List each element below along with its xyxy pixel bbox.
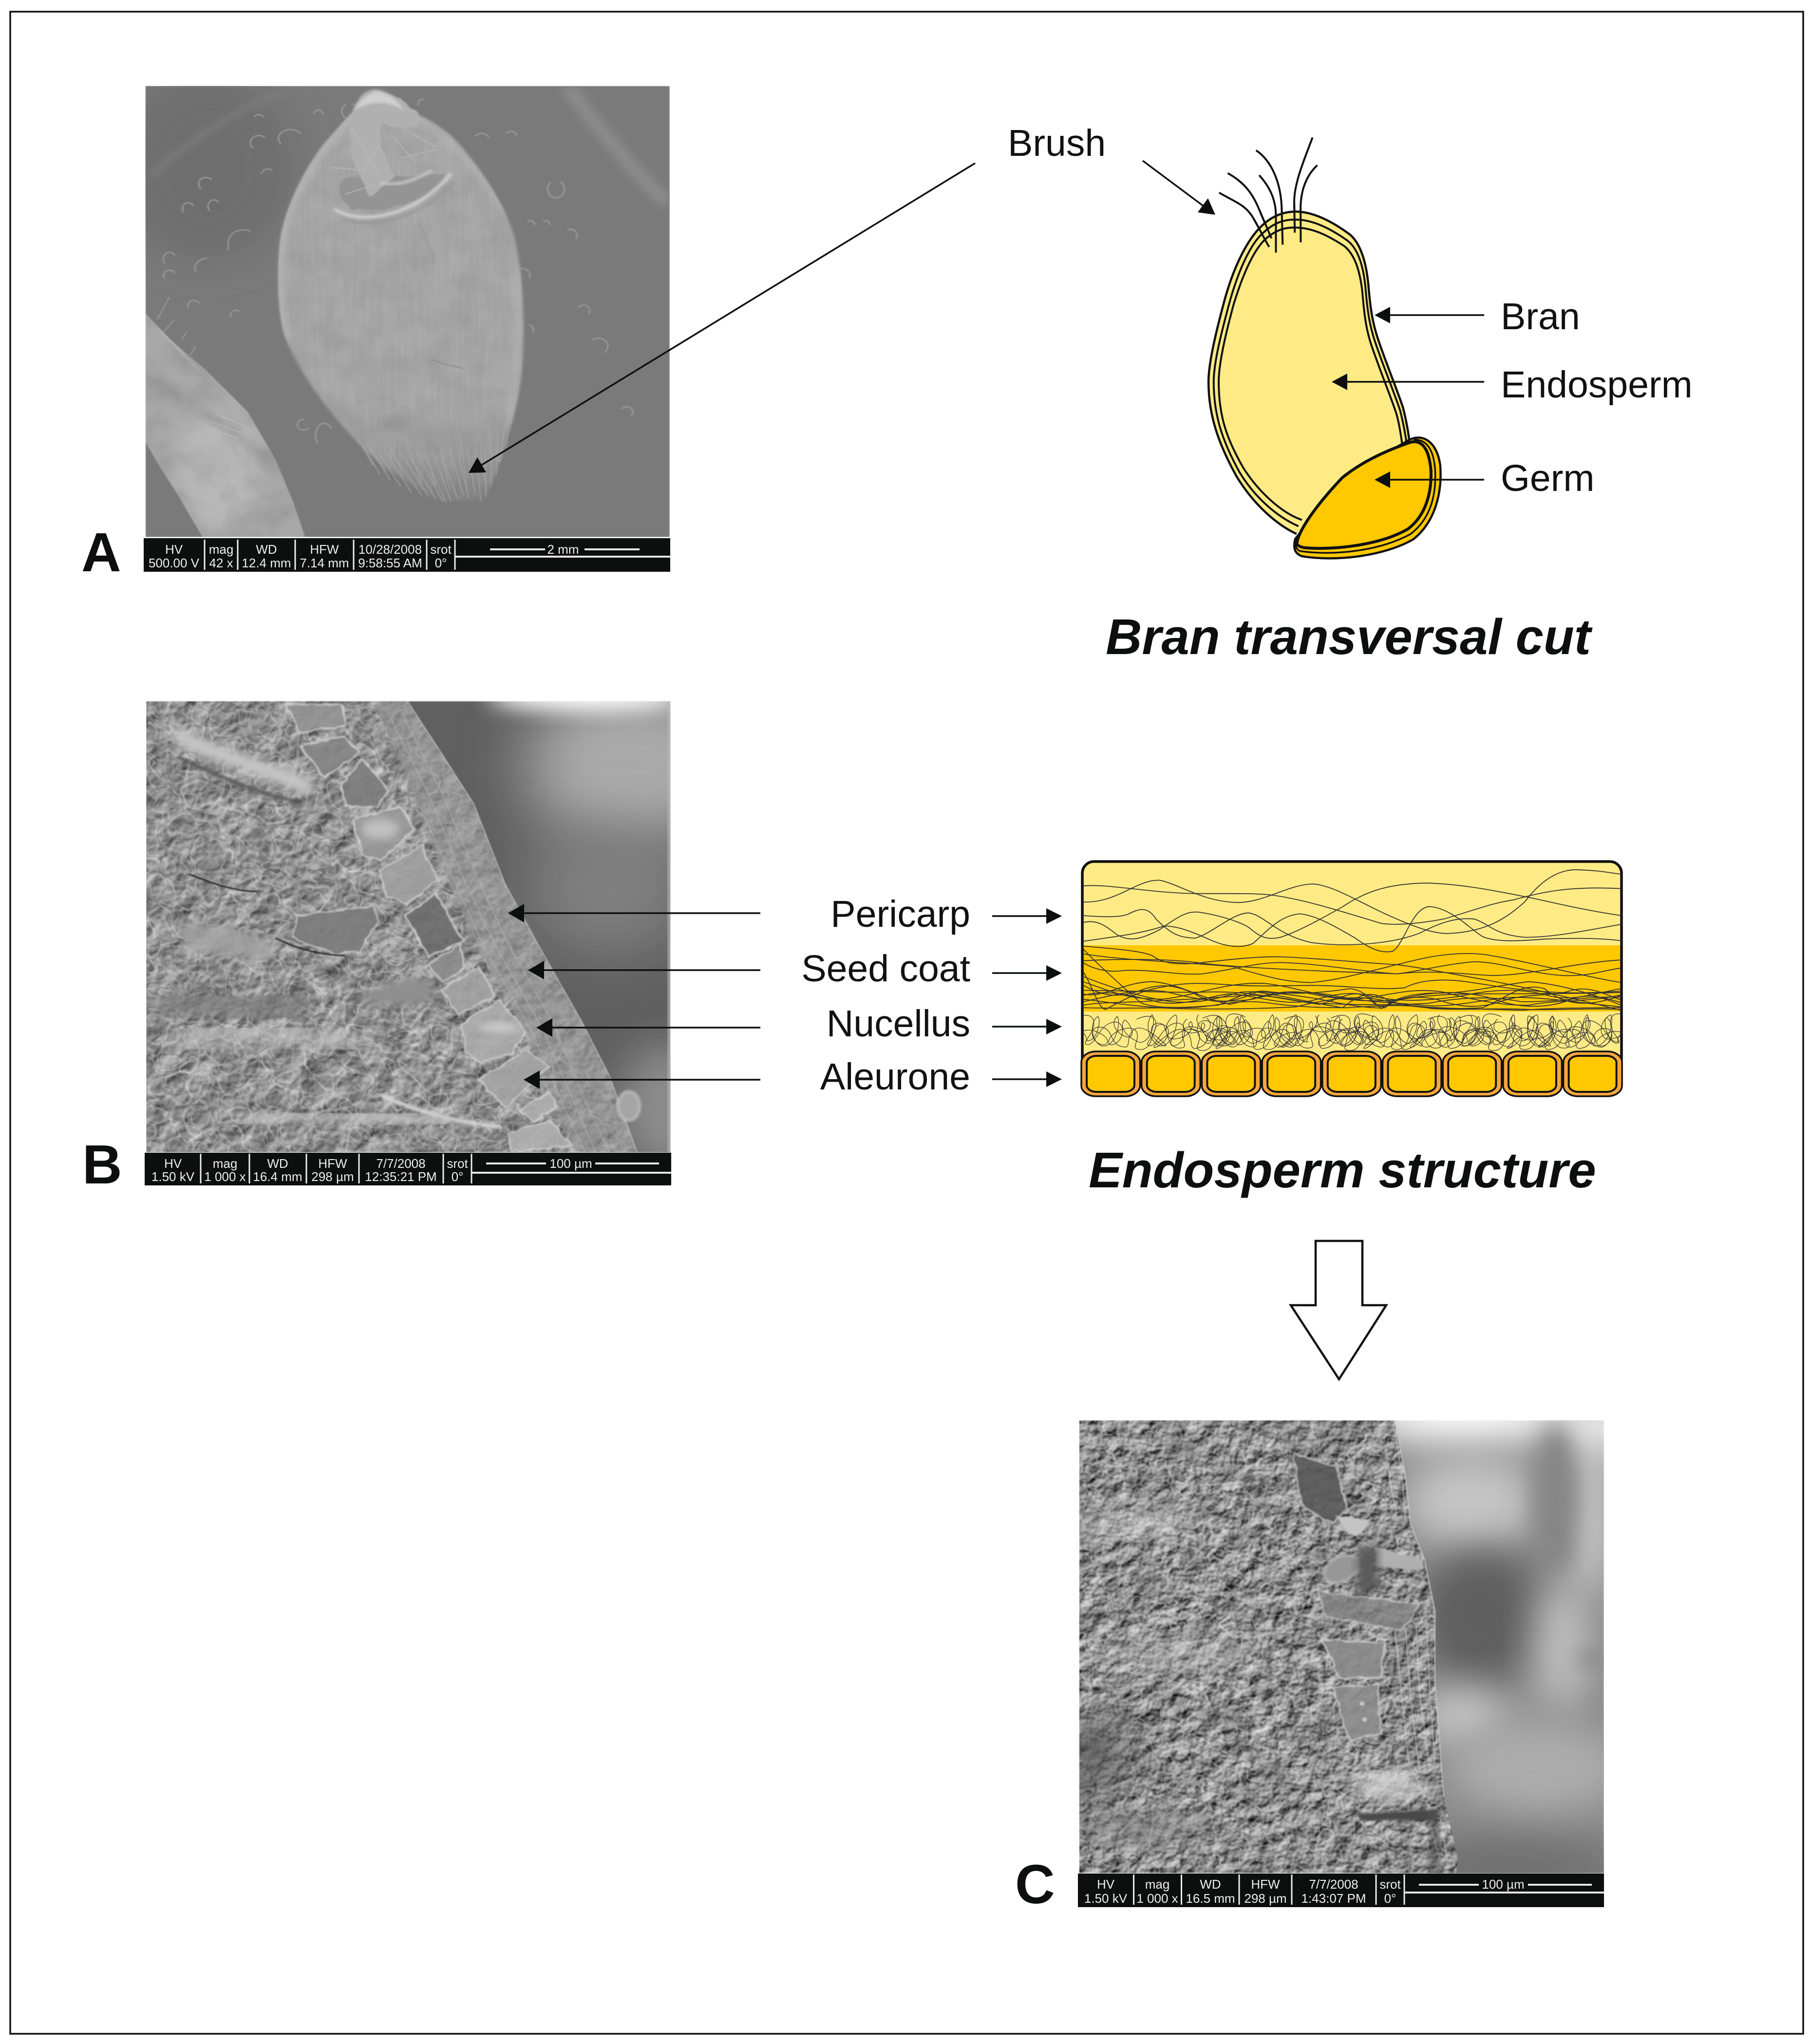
endosperm with bran layers	[1208, 212, 1441, 558]
heading: Bran transversal cut: Bran transversal cut	[1106, 609, 1593, 665]
re-draw hair roots over grain	[1254, 202, 1301, 253]
aleurone cells	[286, 704, 571, 1152]
arrow: aleurone on photo B	[524, 1070, 760, 1089]
diagram: endosperm layered structure	[1075, 862, 1645, 1096]
box outline	[1082, 862, 1622, 1071]
SEM photo B	[146, 682, 735, 1172]
SEM data bar A: 2 mm	[547, 542, 579, 557]
SEM data bar A: 12.4 mm	[242, 556, 291, 570]
label: Endosperm: Endosperm	[1501, 364, 1693, 406]
arrow: Endosperm	[1332, 374, 1484, 390]
SEM data bar A: 7.14 mm	[300, 556, 349, 570]
SEM data bar A	[144, 538, 670, 572]
SEM data bar B: 7/7/2008	[376, 1156, 426, 1171]
SEM data bar A: mag	[209, 542, 233, 557]
SEM data bar C: 100 µm	[1482, 1877, 1525, 1892]
SEM data bar C: HFW	[1251, 1877, 1280, 1892]
SEM data bar B: HV	[164, 1156, 182, 1171]
label: Nucellus: Nucellus	[827, 1003, 970, 1045]
aleurone cells	[1081, 1051, 1622, 1096]
SEM data bar C: WD	[1200, 1877, 1221, 1892]
panel letter A: A	[81, 522, 121, 583]
SEM data bar A: HV	[165, 542, 183, 557]
arrow: Aleurone to layer	[992, 1071, 1062, 1087]
connector arrow from grain photo to Brush label	[469, 163, 975, 473]
nucellus tangle	[1075, 1014, 1645, 1050]
panel letter B: B	[82, 1134, 122, 1195]
arrow: Bran	[1375, 307, 1484, 323]
SEM data bar A: srot	[430, 542, 452, 557]
SEM photo A	[115, 72, 670, 540]
fibres	[1075, 870, 1645, 1050]
label: Brush: Brush	[1008, 122, 1106, 164]
arrow: Seed coat to layer	[992, 965, 1062, 981]
SEM data bar B: 16.4 mm	[253, 1169, 302, 1184]
SEM data bar C: 16.5 mm	[1186, 1891, 1235, 1906]
SEM data bar C: HV	[1097, 1877, 1115, 1892]
SEM data bar B: 1 000 x	[204, 1169, 246, 1184]
arrow: Pericarp to layer	[992, 908, 1062, 924]
SEM data bar C: srot	[1379, 1877, 1401, 1892]
label: Seed coat: Seed coat	[801, 948, 970, 990]
label: Pericarp: Pericarp	[830, 893, 970, 935]
arrow: Brush to hairs	[1143, 161, 1215, 215]
SEM photo C	[1061, 1387, 1649, 1895]
surface bubble	[618, 1091, 640, 1121]
arrow: Nucellus to layer	[992, 1019, 1062, 1034]
arrow: nucellus on photo B	[536, 1018, 760, 1037]
brush hairs	[1219, 137, 1317, 253]
SEM data bar B: 100 µm	[549, 1156, 592, 1171]
seed coat gold band	[1083, 945, 1621, 1012]
SEM data bar C: 1:43:07 PM	[1302, 1891, 1366, 1906]
SEM data bar C: mag	[1145, 1877, 1170, 1892]
SEM data bar B	[145, 1153, 671, 1185]
SEM data bar A: 42 x	[209, 556, 233, 570]
arrow: seed coat on photo B	[528, 961, 760, 979]
SEM data bar A: HFW	[310, 542, 339, 557]
SEM data bar B: 1.50 kV	[151, 1169, 195, 1184]
panel C: SEM photo of transverse section	[1015, 1387, 1649, 1915]
second grain at lower left	[143, 311, 310, 540]
SEM data bar B: WD	[267, 1156, 288, 1171]
endosperm tissue	[146, 701, 668, 1152]
SEM data bar C	[1078, 1874, 1604, 1907]
main grain body	[278, 89, 524, 501]
SEM data bar B: 298 µm	[311, 1169, 354, 1184]
SEM data bar B: srot	[447, 1156, 468, 1171]
SEM data bar B: 12:35:21 PM	[365, 1169, 437, 1184]
label: Aleurone: Aleurone	[820, 1056, 970, 1098]
panel B: SEM photo of endosperm section	[82, 682, 735, 1195]
panel letter C: C	[1015, 1854, 1055, 1915]
bran edge streaks	[1385, 1431, 1447, 1860]
SEM data bar A: 500.00 V	[149, 556, 200, 570]
brush hairs	[359, 421, 510, 503]
SEM data bar A: 10/28/2008	[358, 542, 422, 557]
SEM data bar A: WD	[256, 542, 277, 557]
arrow: pericarp on photo B	[508, 904, 760, 922]
SEM data bar A: 0°	[435, 556, 447, 570]
grain tip folds	[340, 173, 444, 210]
heading: Endosperm structure: Endosperm structure	[1089, 1142, 1596, 1198]
SEM data bar C: 298 µm	[1244, 1891, 1287, 1906]
SEM data bar C: 7/7/2008	[1309, 1877, 1358, 1892]
SEM data bar C: 1.50 kV	[1084, 1891, 1128, 1906]
diagram: grain transversal cut	[1208, 137, 1441, 558]
pale layer background	[1082, 862, 1622, 1071]
panel A: SEM photo of whole grain	[81, 72, 670, 583]
SEM data bar B: mag	[213, 1156, 237, 1171]
SEM data bar C: 0°	[1384, 1891, 1396, 1906]
germ	[1294, 438, 1441, 558]
label: Germ: Germ	[1501, 457, 1595, 499]
SEM data bar B: 0°	[452, 1169, 463, 1184]
SEM data bar B: HFW	[318, 1156, 347, 1171]
arrow: Germ	[1375, 471, 1484, 488]
craters	[163, 99, 633, 443]
hollow down arrow	[1291, 1241, 1386, 1379]
starch tissue	[1061, 1420, 1469, 1873]
pericarp layer	[373, 701, 638, 1152]
SEM data bar A: 9:58:55 AM	[358, 556, 422, 570]
label: Bran: Bran	[1501, 296, 1580, 338]
SEM data bar C: 1 000 x	[1136, 1891, 1178, 1906]
